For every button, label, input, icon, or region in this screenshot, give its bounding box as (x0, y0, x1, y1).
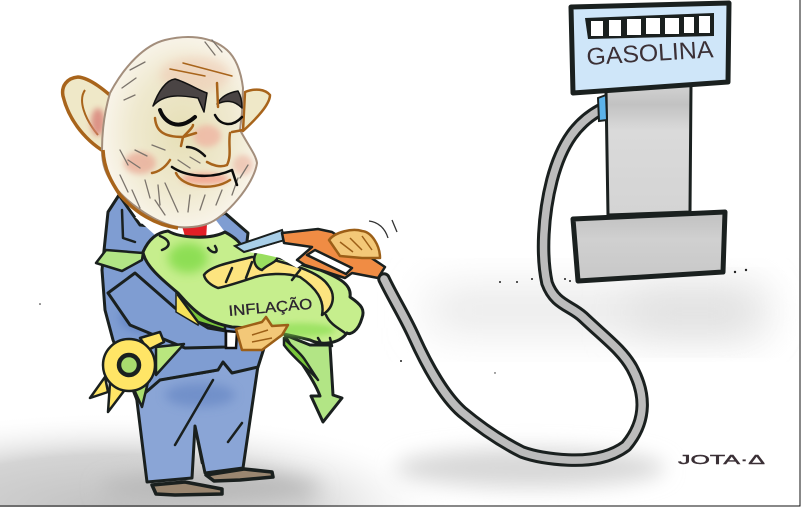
ear inner line (82, 90, 98, 135)
dragon belly (204, 257, 333, 315)
shirt cuff (226, 331, 237, 348)
tail spikes (284, 338, 318, 380)
shirt and tie (135, 215, 228, 236)
white fuel gap (248, 241, 305, 268)
blush (160, 57, 230, 93)
right ear (243, 90, 270, 131)
hose connector (598, 95, 607, 121)
hand on dragon (226, 317, 288, 350)
motion marks (369, 220, 397, 238)
dragon tail (285, 335, 342, 422)
dragon claw (254, 249, 278, 270)
label: INFLAÇÃO: INFLAÇÃO (228, 296, 313, 320)
closed eyes (160, 110, 242, 125)
trouser fold lines (122, 210, 242, 463)
shoes (152, 469, 273, 495)
dragon ear fin (96, 250, 143, 271)
label: GASOLINA: GASOLINA (586, 36, 714, 71)
hose (384, 110, 642, 460)
gas pump (571, 3, 729, 281)
eyebrows (153, 79, 242, 112)
spout (235, 230, 285, 252)
sign (571, 3, 729, 93)
dragon green patch (168, 243, 208, 273)
nostril (187, 147, 205, 156)
right hand (329, 230, 380, 258)
left ear (63, 77, 125, 156)
dragon body (143, 231, 363, 343)
man (90, 195, 273, 495)
nozzle body (282, 229, 385, 278)
nose and face lines (152, 63, 243, 187)
specks (39, 269, 747, 374)
face (102, 37, 257, 227)
trigger opening (307, 250, 352, 274)
pump column (606, 85, 691, 215)
mouth (172, 167, 237, 185)
beard and hair strokes (120, 40, 248, 215)
jaw outline (103, 150, 178, 228)
trousers (135, 340, 260, 482)
finger lines (252, 330, 272, 342)
jacket (102, 195, 265, 400)
dragon body lines (160, 236, 345, 346)
pump base (573, 212, 725, 281)
dragon (96, 231, 363, 422)
price counter (585, 13, 714, 39)
yellow waistcoat detail (176, 292, 200, 325)
sleeve (108, 273, 226, 348)
head (63, 37, 270, 228)
fuel nozzle (235, 220, 397, 278)
rosette ribbon (90, 332, 184, 412)
finger lines (340, 236, 372, 252)
left hand (236, 317, 288, 350)
ear blush (91, 108, 105, 136)
jacket shading (120, 304, 180, 332)
signature: JOTA·Δ (678, 452, 766, 467)
dragon lower spikes (178, 295, 225, 330)
